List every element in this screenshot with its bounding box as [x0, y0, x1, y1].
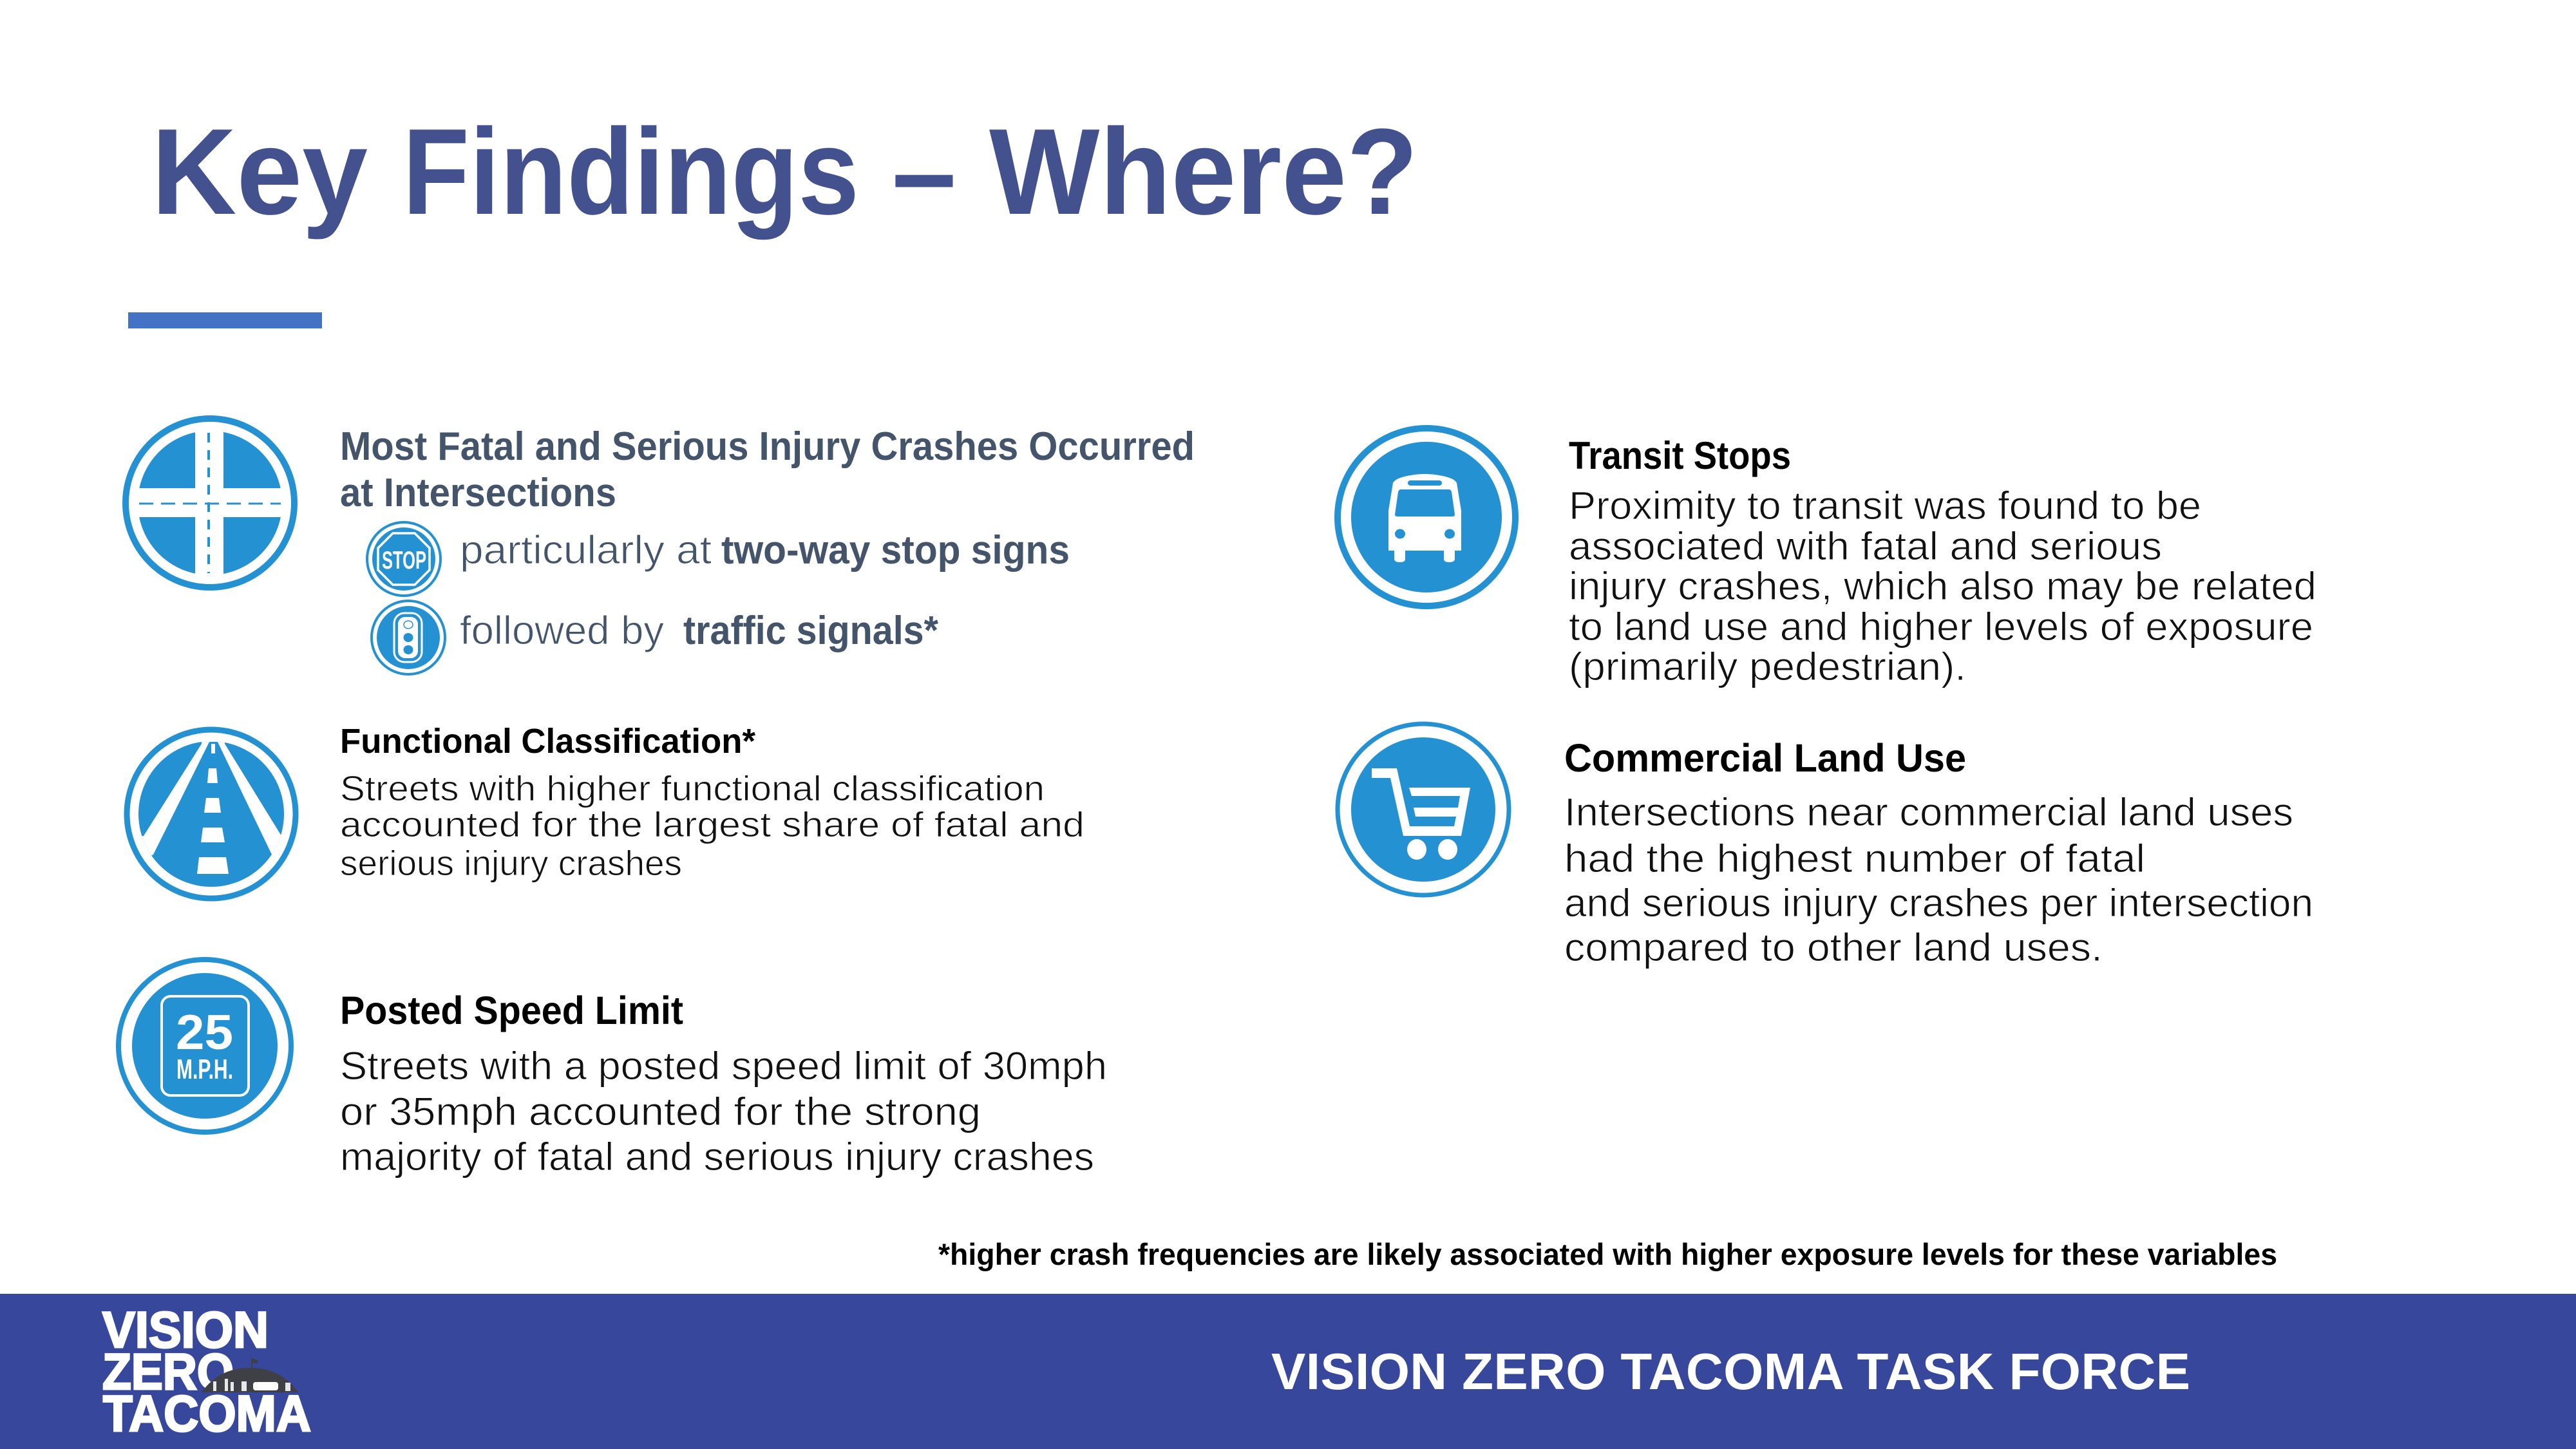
text: functional classification [340, 768, 1084, 883]
text: functional classification: serious injury crashes [340, 843, 682, 883]
footnote: *higher crash frequencies are likely associated with higher exposure levels for these variables [938, 1237, 2277, 1271]
icon: stop sign [367, 522, 440, 596]
logo: Vision Zero Tacoma [102, 1301, 311, 1442]
text: traffic signals: traffic signals* [683, 609, 939, 653]
logo: Vision Zero Tacoma: TACOMA [103, 1385, 311, 1442]
heading: intersections: at Intersections [340, 471, 616, 515]
text: functional classification: Streets with higher functional classification [340, 768, 1045, 808]
text: transit stops: Proximity to transit was found to be [1569, 484, 2201, 527]
text: two-way stop signs [460, 528, 1070, 573]
heading: posted speed limit: Posted Speed Limit [340, 989, 683, 1032]
text: posted speed limit: Streets with a posted speed limit of 30mph [340, 1044, 1107, 1088]
heading: functional classification: Functional Classification* [340, 722, 755, 761]
text: posted speed limit: or 35mph accounted for the strong [340, 1090, 981, 1133]
text: transit stops: injury crashes, which also may be related [1569, 564, 2316, 608]
text: traffic signals [460, 609, 939, 653]
icon: bus [1338, 428, 1515, 606]
text: two-way stop signs: particularly at [460, 528, 712, 573]
heading: intersections [340, 424, 1195, 515]
text: commercial land use [1564, 790, 2313, 969]
logo: Vision Zero Tacoma: VISION [102, 1301, 269, 1358]
title: – [892, 104, 956, 240]
title: Key [151, 104, 368, 240]
title: Where? [989, 104, 1418, 240]
text: two-way stop signs: two-way stop signs [721, 528, 1070, 573]
text: posted speed limit [340, 1044, 1107, 1179]
icon: 25 mph sign: 25 [176, 1005, 233, 1060]
panel: functional classification [127, 722, 1084, 898]
footer title: VISION ZERO TACOMA TASK FORCE [1271, 1343, 2190, 1400]
icon: intersection [126, 419, 294, 587]
icon: 25 mph sign: M.P.H. [176, 1054, 233, 1085]
icon: shopping cart [1338, 724, 1509, 895]
text: transit stops: (primarily pedestrian). [1569, 645, 1966, 688]
title accent bar [128, 312, 322, 328]
text: transit stops [1569, 484, 2316, 688]
panel: intersections [126, 419, 1195, 674]
icon: stop sign: STOP [382, 547, 426, 574]
text: commercial land use: had the highest number of fatal [1564, 837, 2145, 880]
title [151, 104, 1418, 240]
icon: road [127, 730, 296, 898]
heading: transit stops: Transit Stops [1569, 434, 1791, 477]
icon: 25 mph sign [118, 960, 291, 1132]
text: commercial land use: Intersections near commercial land uses [1564, 790, 2293, 834]
icon: traffic signal [372, 601, 445, 674]
title: Findings [402, 104, 859, 240]
panel: commercial land use [1338, 724, 2313, 969]
footer band [0, 1294, 2576, 1449]
text: commercial land use: and serious injury crashes per intersection [1564, 881, 2313, 925]
panel: posted speed limit [118, 960, 1107, 1179]
text: traffic signals: followed by [460, 609, 664, 653]
text: posted speed limit: majority of fatal and serious injury crashes [340, 1135, 1094, 1179]
heading: intersections: Most Fatal and Serious Injury Crashes Occurred [340, 424, 1195, 469]
panel: transit stops [1338, 428, 2316, 688]
text: transit stops: associated with fatal and serious [1569, 524, 2162, 568]
text: functional classification: accounted for the largest share of fatal and [340, 804, 1084, 844]
heading: commercial land use: Commercial Land Use [1564, 736, 1966, 780]
text: commercial land use: compared to other land uses. [1564, 925, 2103, 969]
logo: Vision Zero Tacoma: ZERO [102, 1343, 234, 1400]
text: transit stops: to land use and higher levels of exposure [1569, 605, 2313, 649]
